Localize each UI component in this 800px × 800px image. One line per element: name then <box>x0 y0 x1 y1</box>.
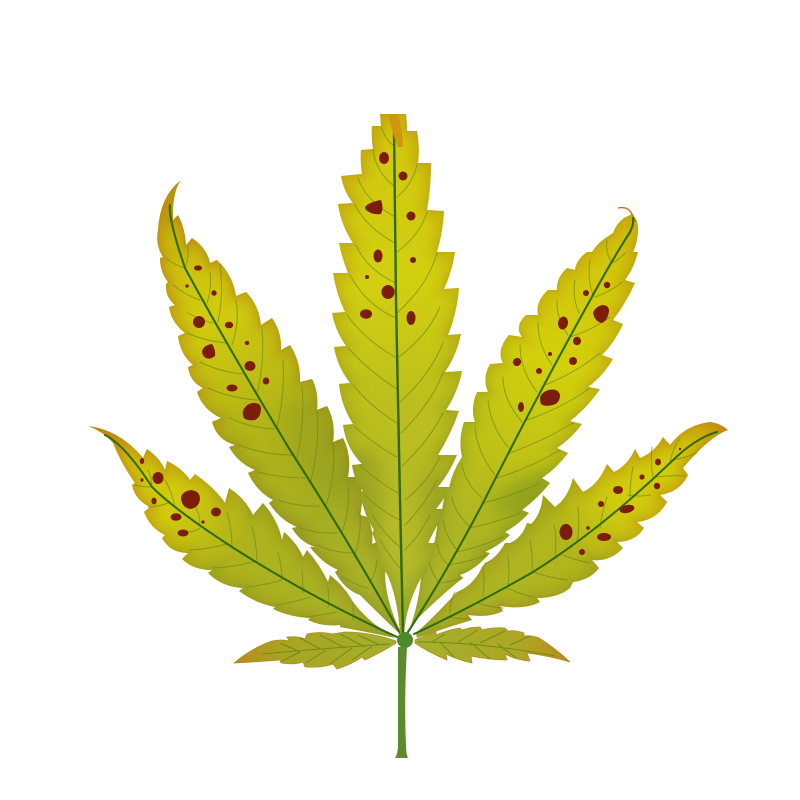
midrib: upper right <box>408 218 633 632</box>
orange streak at top of center leaflet <box>388 114 403 147</box>
veins: upper right <box>428 240 625 583</box>
midrib: lower right <box>414 432 717 634</box>
curled leaf tip <box>618 208 636 222</box>
node where leaflets meet <box>397 632 413 648</box>
veins: lower right <box>447 438 697 619</box>
veins: upper left <box>165 247 377 588</box>
leaflet: center <box>332 114 462 634</box>
leaflet: upper left <box>157 180 401 634</box>
rust spots: lower left <box>140 458 221 536</box>
leaflet: upper right <box>408 208 638 633</box>
leaflet: small lower right <box>415 627 570 663</box>
leaflet: lower right <box>414 422 728 638</box>
stem <box>395 647 408 758</box>
rust spots: center <box>360 152 416 325</box>
illustration: cannabis leaf with yellowing and rust spots <box>88 114 728 758</box>
leaflet: small lower left <box>234 632 396 669</box>
veins: lower left <box>135 470 353 620</box>
rust spots: upper left <box>185 265 269 420</box>
rust spots: lower right <box>560 448 681 555</box>
midrib: lower left <box>105 435 397 637</box>
leaflet: lower left <box>88 426 397 638</box>
midrib: upper left <box>170 205 400 633</box>
midrib: center <box>394 130 403 634</box>
rust spots: upper right <box>512 282 610 412</box>
veins: center <box>347 128 443 570</box>
